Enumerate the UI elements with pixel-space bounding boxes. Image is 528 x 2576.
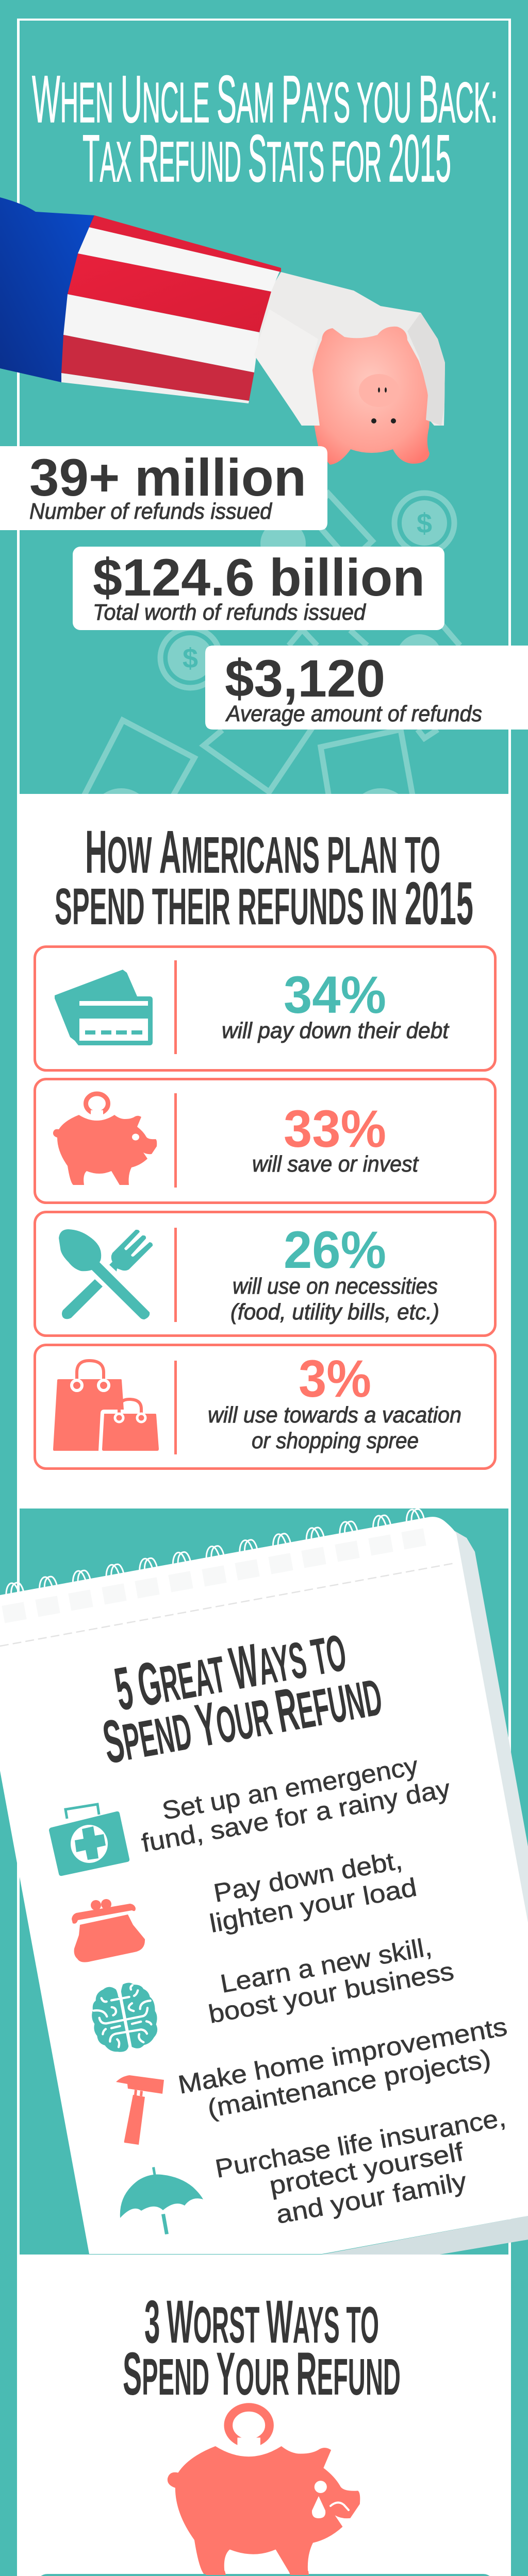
icon: brain bbox=[92, 1982, 157, 2052]
heading: 5 great ways: 5 GREAT WAYS TO bbox=[110, 1616, 351, 1724]
panel: vacation or shopping spree: will use towards a vacation bbox=[208, 1402, 461, 1428]
item: life insurance: and your family bbox=[274, 2166, 469, 2229]
item: emergency fund bbox=[49, 1751, 452, 1876]
icon: spoon and fork bbox=[59, 1229, 153, 1319]
panel: will pay down debt: will pay down their debt bbox=[222, 1018, 450, 1043]
item: emergency fund: Set up an emergency bbox=[160, 1751, 420, 1825]
item: home improvements: (maintenance projects) bbox=[205, 2044, 493, 2123]
panel: will use on necessities: 26% bbox=[284, 1221, 386, 1279]
panel: will use on necessities: will use on necessities bbox=[233, 1274, 438, 1299]
title bbox=[32, 61, 498, 196]
panel: will use on necessities: (food, utility bills, etc.) bbox=[230, 1299, 439, 1325]
panel: gambling bbox=[37, 2575, 493, 2576]
item: learn a new skill bbox=[92, 1932, 456, 2052]
panel: will use on necessities bbox=[35, 1212, 495, 1335]
icon: crying piggy bank bbox=[168, 2408, 360, 2575]
glove back bbox=[254, 272, 445, 426]
item: home improvements: Make home improvements bbox=[176, 2012, 509, 2099]
item: pay down debt: Pay down debt, bbox=[211, 1845, 404, 1908]
stat card: $3,120 bbox=[205, 646, 528, 730]
icon: first aid kit bbox=[49, 1804, 129, 1876]
sleeve bbox=[0, 197, 94, 382]
icon: shopping bags bbox=[53, 1361, 159, 1451]
panel: will save or invest: will save or invest bbox=[252, 1151, 419, 1177]
coin dollar signs: $ bbox=[183, 643, 198, 674]
icon: coin purse bbox=[72, 1899, 145, 1962]
stat card: $124.6 billion: $124.6 billion bbox=[93, 548, 425, 607]
panel: will pay down debt: 34% bbox=[284, 965, 386, 1024]
item: pay down debt bbox=[72, 1845, 419, 1962]
piggy feet over panel bbox=[206, 2571, 309, 2575]
notebook spiral rings bbox=[6, 1509, 424, 1597]
notebook: 5 great ways bbox=[0, 1509, 528, 2255]
heading: 5 great ways bbox=[98, 1616, 387, 1777]
stat card: $3,120: Average amount of refunds bbox=[225, 701, 482, 726]
title: TAX REFUND STATS FOR 2015 bbox=[82, 121, 451, 196]
panel: vacation or shopping spree bbox=[35, 1345, 495, 1468]
background money pattern bbox=[81, 489, 462, 794]
hole marks bbox=[2, 1528, 426, 1623]
panel: will save or invest bbox=[35, 1079, 495, 1202]
stat card: $3,120: $3,120 bbox=[225, 649, 385, 708]
stat card: 39+ million: 39+ million bbox=[29, 448, 306, 507]
glove fingers bbox=[254, 309, 320, 426]
coin dollar signs: $ bbox=[417, 508, 432, 539]
icon: hammer bbox=[116, 2075, 164, 2145]
item: life insurance bbox=[120, 2103, 508, 2234]
stat card: $124.6 billion bbox=[73, 547, 444, 630]
panel: vacation or shopping spree: or shopping spree bbox=[252, 1428, 419, 1453]
panel: hero bbox=[20, 21, 508, 850]
item: pay down debt: lighten your load bbox=[207, 1873, 419, 1938]
panel: will save or invest: 33% bbox=[284, 1099, 386, 1158]
heading: how Americans plan bbox=[55, 818, 473, 938]
item: life insurance: protect yourself bbox=[267, 2137, 466, 2200]
illustration: Uncle Sam arm holding piggy bank bbox=[0, 197, 445, 465]
item: learn a new skill: boost your business bbox=[206, 1956, 456, 2029]
heading: 3 worst ways: SPEND YOUR REFUND bbox=[123, 2340, 401, 2408]
item: emergency fund: fund, save for a rainy day bbox=[139, 1774, 452, 1858]
notebook page bbox=[0, 1517, 528, 2254]
icon: umbrella bbox=[120, 2167, 203, 2234]
heading: 3 worst ways bbox=[123, 2288, 401, 2408]
notebook page edges bbox=[322, 1528, 528, 2255]
heading: 3 worst ways: 3 WORST WAYS TO bbox=[144, 2288, 379, 2356]
heading: 5 great ways: SPEND YOUR REFUND bbox=[98, 1660, 387, 1777]
piggy bank bbox=[311, 327, 430, 465]
coin dollar signs bbox=[183, 508, 432, 674]
stat card: 39+ million bbox=[0, 446, 327, 530]
item: learn a new skill: Learn a new skill, bbox=[218, 1932, 434, 1998]
item: life insurance: Purchase life insurance, bbox=[213, 2103, 508, 2183]
panel: will pay down debt bbox=[35, 947, 495, 1071]
panel: notebook section background bbox=[20, 1509, 508, 2255]
panel: vacation or shopping spree: 3% bbox=[299, 1349, 371, 1408]
icon: credit cards bbox=[55, 970, 153, 1045]
stat card: $124.6 billion: Total worth of refunds issued bbox=[93, 600, 366, 625]
item: home improvements bbox=[116, 2012, 509, 2145]
striped cuff bbox=[61, 215, 281, 403]
icon: piggy bank bbox=[53, 1094, 157, 1185]
stat card: 39+ million: Number of refunds issued bbox=[29, 499, 272, 524]
